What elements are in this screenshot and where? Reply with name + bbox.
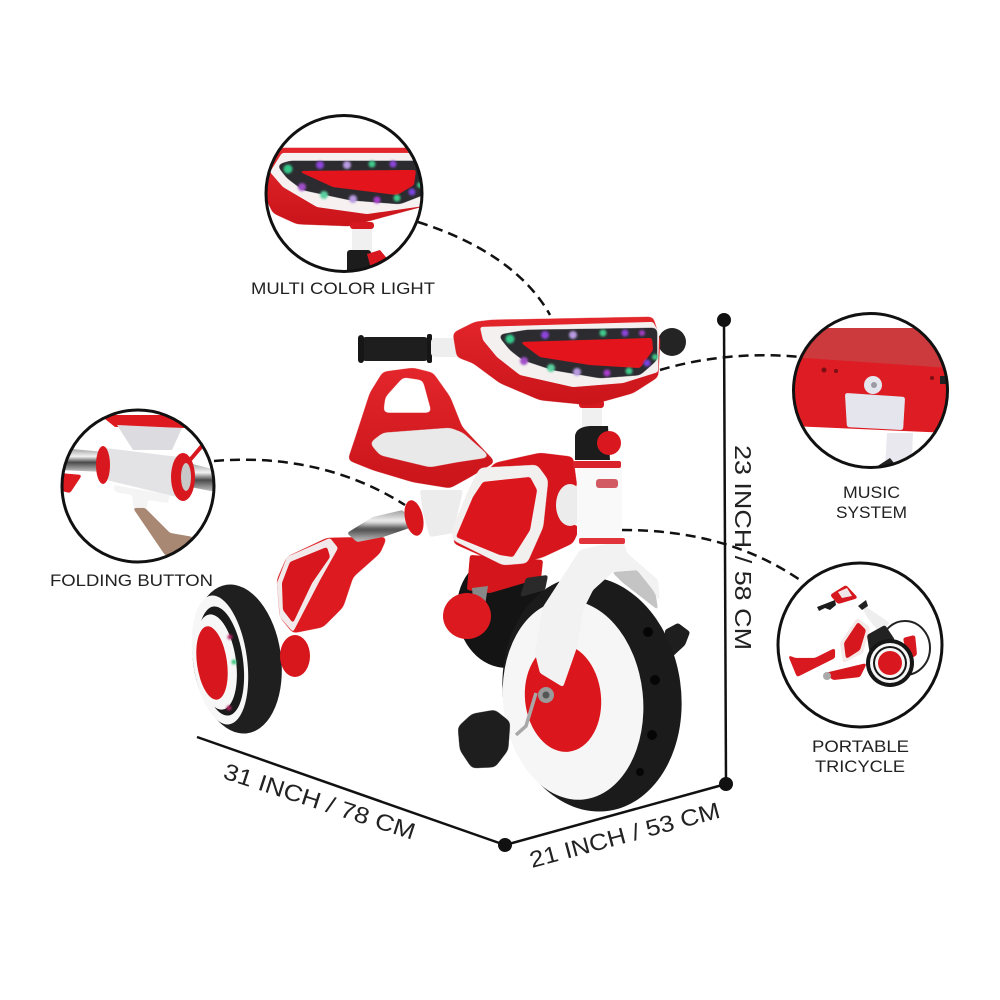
under-frame red [467, 555, 543, 593]
connector cap [556, 484, 584, 526]
hidden rear wheel [450, 550, 556, 674]
inset photo: speaker close-up [790, 328, 950, 468]
label: folding button: FOLDING BUTTON [50, 572, 213, 590]
tricycle illustration [183, 317, 697, 823]
tyre tread dots [636, 627, 660, 776]
dimension label: length: 31 INCH / 78 CM [220, 758, 419, 845]
dashed connector: music system [660, 355, 800, 370]
label: music system: SYSTEM [836, 504, 907, 522]
label: music system: MUSIC [843, 484, 900, 502]
handlebar console [453, 317, 660, 405]
dimension label: height: 23 INCH / 58 CM [730, 445, 756, 650]
label: multi color light: MULTI COLOR LIGHT [251, 280, 435, 298]
dimension line: length [197, 737, 505, 845]
handlebar grip [358, 334, 463, 363]
dimension line: width [498, 784, 726, 852]
panel: portable tricycle inset [778, 563, 942, 727]
chrome tube [347, 510, 412, 542]
inset photo: folding button close-up [58, 415, 216, 560]
pedal crank [516, 687, 554, 735]
back pedal [665, 623, 690, 657]
dashed connector: folding button [214, 460, 405, 505]
red collar [401, 499, 427, 537]
label: music system [836, 484, 907, 522]
rear leg [277, 537, 387, 633]
inset photo: folded tricycle [788, 585, 930, 687]
neck [575, 400, 621, 460]
head stem [573, 461, 625, 544]
inset border [62, 410, 214, 562]
panel: music system inset [790, 314, 950, 468]
label: portable tricycle: TRICYCLE [815, 758, 905, 776]
dimension line: height [717, 313, 733, 791]
front pedal [458, 710, 510, 768]
console LED lights [506, 330, 658, 376]
inset photo: console close-up [268, 148, 420, 270]
dashed connector: multi color light [418, 222, 550, 315]
front wheel white disc [493, 593, 653, 807]
left red ball [280, 635, 310, 677]
infographic canvas [52, 114, 949, 868]
right knob [658, 328, 686, 356]
label: portable tricycle: PORTABLE [812, 738, 909, 756]
seat post white [420, 490, 463, 537]
panel: folding button inset [58, 410, 216, 562]
fork [535, 540, 660, 687]
dashed connector: portable tricycle [622, 530, 803, 582]
inset border [266, 116, 422, 272]
panel: multi color light inset [262, 116, 430, 274]
front wheel red hub [520, 640, 606, 756]
frame body [453, 453, 580, 567]
frame side panel [456, 477, 537, 557]
frame side panel outline [452, 465, 548, 565]
inset border [794, 314, 948, 468]
inset border [778, 563, 942, 727]
axle stub and red ball [443, 575, 548, 639]
front tyre [487, 565, 697, 823]
rear left wheel [183, 579, 291, 739]
dimension label: width: 21 INCH / 53 CM [527, 797, 723, 873]
gray arch shadow behind fork [612, 570, 658, 610]
label: portable tricycle [812, 738, 909, 776]
seat [348, 368, 495, 488]
